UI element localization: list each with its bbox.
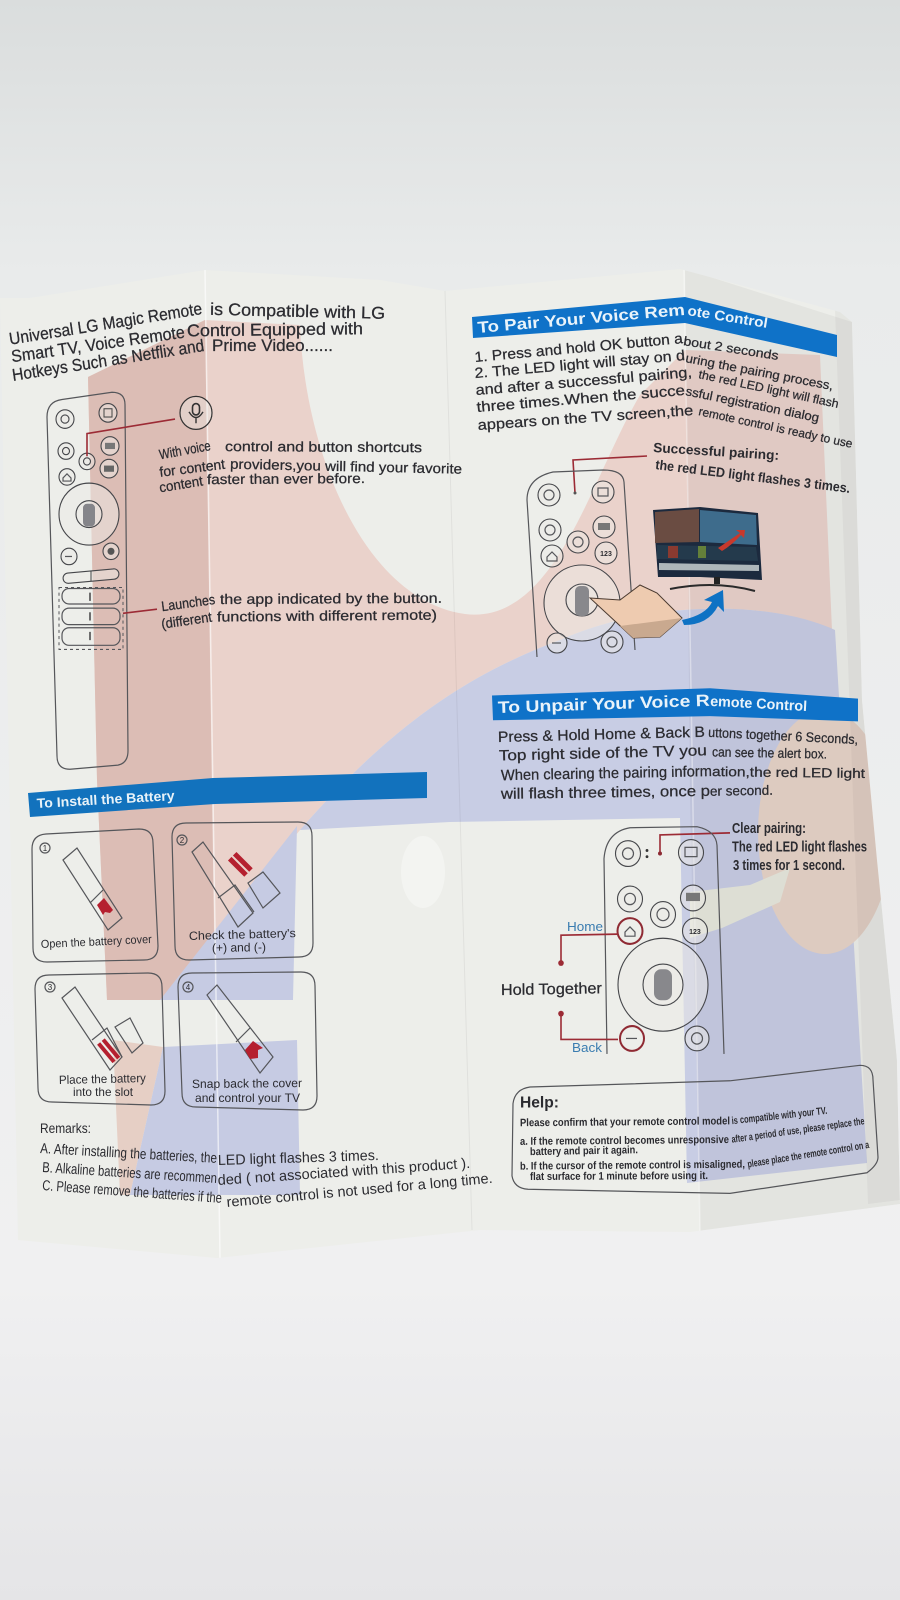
- heading: to pair your voice remote control: To Pair Your Voice Rem: [477, 302, 686, 337]
- voice control description: With voice: [158, 438, 212, 462]
- unpairing instructions: can see the alert box.: [712, 744, 827, 762]
- remarks: LED light flashes 3 times.: [218, 1148, 379, 1169]
- panel: step 3 place battery: into the slot: [73, 1085, 134, 1099]
- heading: to unpair your voice remote control: To Unpair Your Voice R: [498, 692, 710, 717]
- unpairing instructions: ation,the red LED light: [712, 764, 866, 781]
- title: [8, 299, 385, 385]
- remote control diagram: pairing: 123: [600, 551, 612, 558]
- panel: step 2 check polarity: (+) and (-): [212, 940, 266, 955]
- unpairing instructions: Top right side of the TV you: [499, 743, 707, 765]
- pairing instructions: the red LED light will flash: [697, 367, 840, 411]
- pairing instructions: remote control is ready to use: [697, 404, 854, 451]
- panel: step 3 place battery: [35, 973, 165, 1105]
- icon: pressing hand: [590, 585, 682, 638]
- panel: step 2 check polarity: 2: [180, 836, 185, 845]
- panel: step 3 place battery: Place the battery: [59, 1071, 146, 1087]
- panel: step 3 place battery: 3: [48, 983, 53, 992]
- unpairing instructions: er second.: [710, 782, 773, 799]
- remote control diagram: pairing: [527, 470, 635, 657]
- pairing instructions: and after a successful pairing,: [475, 365, 693, 399]
- pairing instructions: 1. Press and hold OK button a: [474, 331, 685, 366]
- title: Hotkeys Such as Netflix and: [11, 336, 205, 385]
- pairing instructions: [474, 331, 854, 451]
- title: Control Equipped with: [187, 319, 363, 341]
- panel: help: a. If the remote control becomes unresponsive: [520, 1134, 729, 1148]
- successful pairing callout: the red LED light flashes 3 times.: [655, 457, 851, 496]
- remarks: C. Please remove the batteries if the: [42, 1178, 222, 1207]
- clear pairing callout: 3 times for 1 second.: [733, 858, 845, 874]
- voice control description: content: [158, 473, 204, 495]
- panel: help: is compatible with your TV.: [731, 1106, 828, 1127]
- remote control diagram: unpairing: 123: [689, 928, 701, 936]
- panel: step 4 snap back cover: Snap back the cover: [192, 1076, 302, 1091]
- panel: step 4 snap back cover: and control your TV: [195, 1091, 300, 1105]
- panel: step 2 check polarity: [172, 822, 313, 960]
- panel: step 2 check polarity: Check the battery's: [189, 926, 296, 943]
- paper sheet: [88, 270, 900, 1256]
- hold together labels: [501, 920, 618, 1055]
- remarks: B. Alkaline batteries are recommen: [42, 1160, 217, 1187]
- clear pairing callout: The red LED light flashes: [732, 839, 867, 856]
- clear pairing callout: Clear pairing:: [732, 821, 806, 837]
- voice control description: faster than ever before.: [207, 471, 365, 487]
- tv illustration: [653, 507, 762, 591]
- icon: blue arrow to tv: [682, 590, 724, 625]
- pairing instructions: 2. The LED light will stay on d: [474, 348, 686, 382]
- unpairing instructions: Press & Hold Home & Back B: [498, 725, 705, 746]
- icon: microphone: [180, 396, 212, 429]
- panel: help: Help:: [520, 1094, 559, 1112]
- remote control diagram: overview: [47, 392, 175, 769]
- remarks: ded ( not associated with this product ).: [217, 1156, 471, 1189]
- voice control description: for content: [159, 456, 226, 480]
- app button description: Launches: [160, 592, 216, 614]
- app button description: [160, 591, 442, 632]
- pairing instructions: three times.When the succe: [476, 383, 686, 416]
- heading: to pair your voice remote control: ote Control: [687, 302, 769, 331]
- app button description: the app indicated by the button.: [220, 591, 442, 607]
- remarks: [40, 1121, 493, 1211]
- voice control description: providers,you will find your favorite: [230, 456, 463, 477]
- pairing instructions: ssful registration dialog: [684, 384, 820, 425]
- unpairing instructions: [498, 725, 866, 803]
- unpairing instructions: will flash three times, once p: [500, 784, 710, 803]
- panel: help: b. If the cursor of the remote control is misaligned,: [520, 1158, 745, 1173]
- title: Prime Video......: [212, 336, 333, 355]
- remarks: Remarks:: [40, 1121, 91, 1136]
- panel: step 4 snap back cover: 4: [186, 983, 191, 992]
- panel: help: battery and pair it again.: [530, 1144, 638, 1158]
- hold together labels: Hold Together: [501, 980, 602, 999]
- clear pairing callout: [660, 821, 867, 874]
- panel: help: Please confirm that your remote control model: [520, 1115, 730, 1129]
- panel: help: [512, 1065, 878, 1193]
- voice control description: [158, 438, 463, 495]
- panel: step 1 open cover: Open the battery cover: [41, 934, 152, 951]
- app button description: functions with different remote): [217, 607, 437, 625]
- title: is Compatible with LG: [210, 300, 385, 323]
- panel: step 4 snap back cover: [178, 972, 317, 1110]
- panel: help: flat surface for 1 minute before using it.: [530, 1170, 708, 1183]
- hold together labels: Home: [567, 920, 603, 934]
- pairing instructions: appears on the TV screen,the: [477, 403, 694, 434]
- hold together labels: Back: [572, 1041, 603, 1055]
- panel: step 1 open cover: [32, 829, 158, 962]
- successful pairing callout: [573, 440, 851, 496]
- panel: step 1 open cover: 1: [43, 844, 48, 853]
- heading: to install the battery: To Install the Battery: [36, 788, 175, 811]
- remote control diagram: unpairing: [604, 827, 724, 1054]
- voice control description: control and button shortcuts: [225, 439, 422, 455]
- heading: to install the battery: [28, 772, 427, 817]
- photo of unfolded leaflet: [0, 0, 900, 1258]
- title: Smart TV, Voice Remote: [10, 322, 186, 366]
- heading: to unpair your voice remote control: emote Control: [710, 694, 807, 715]
- successful pairing callout: Successful pairing:: [653, 440, 780, 463]
- pairing instructions: bout 2 seconds: [683, 334, 780, 363]
- title: Universal LG Magic Remote: [8, 299, 203, 349]
- remarks: remote control is not used for a long time.: [226, 1171, 493, 1211]
- pairing instructions: uring the pairing process,: [684, 351, 834, 393]
- unpairing instructions: When clearing the pairing inform: [501, 764, 712, 784]
- heading: to pair your voice remote control: [472, 297, 837, 357]
- unpairing instructions: uttons together 6 Seconds,: [708, 725, 858, 747]
- heading: to unpair your voice remote control: [492, 688, 858, 721]
- remarks: A. After installing the batteries, the: [40, 1141, 217, 1167]
- app button description: (different: [160, 609, 213, 632]
